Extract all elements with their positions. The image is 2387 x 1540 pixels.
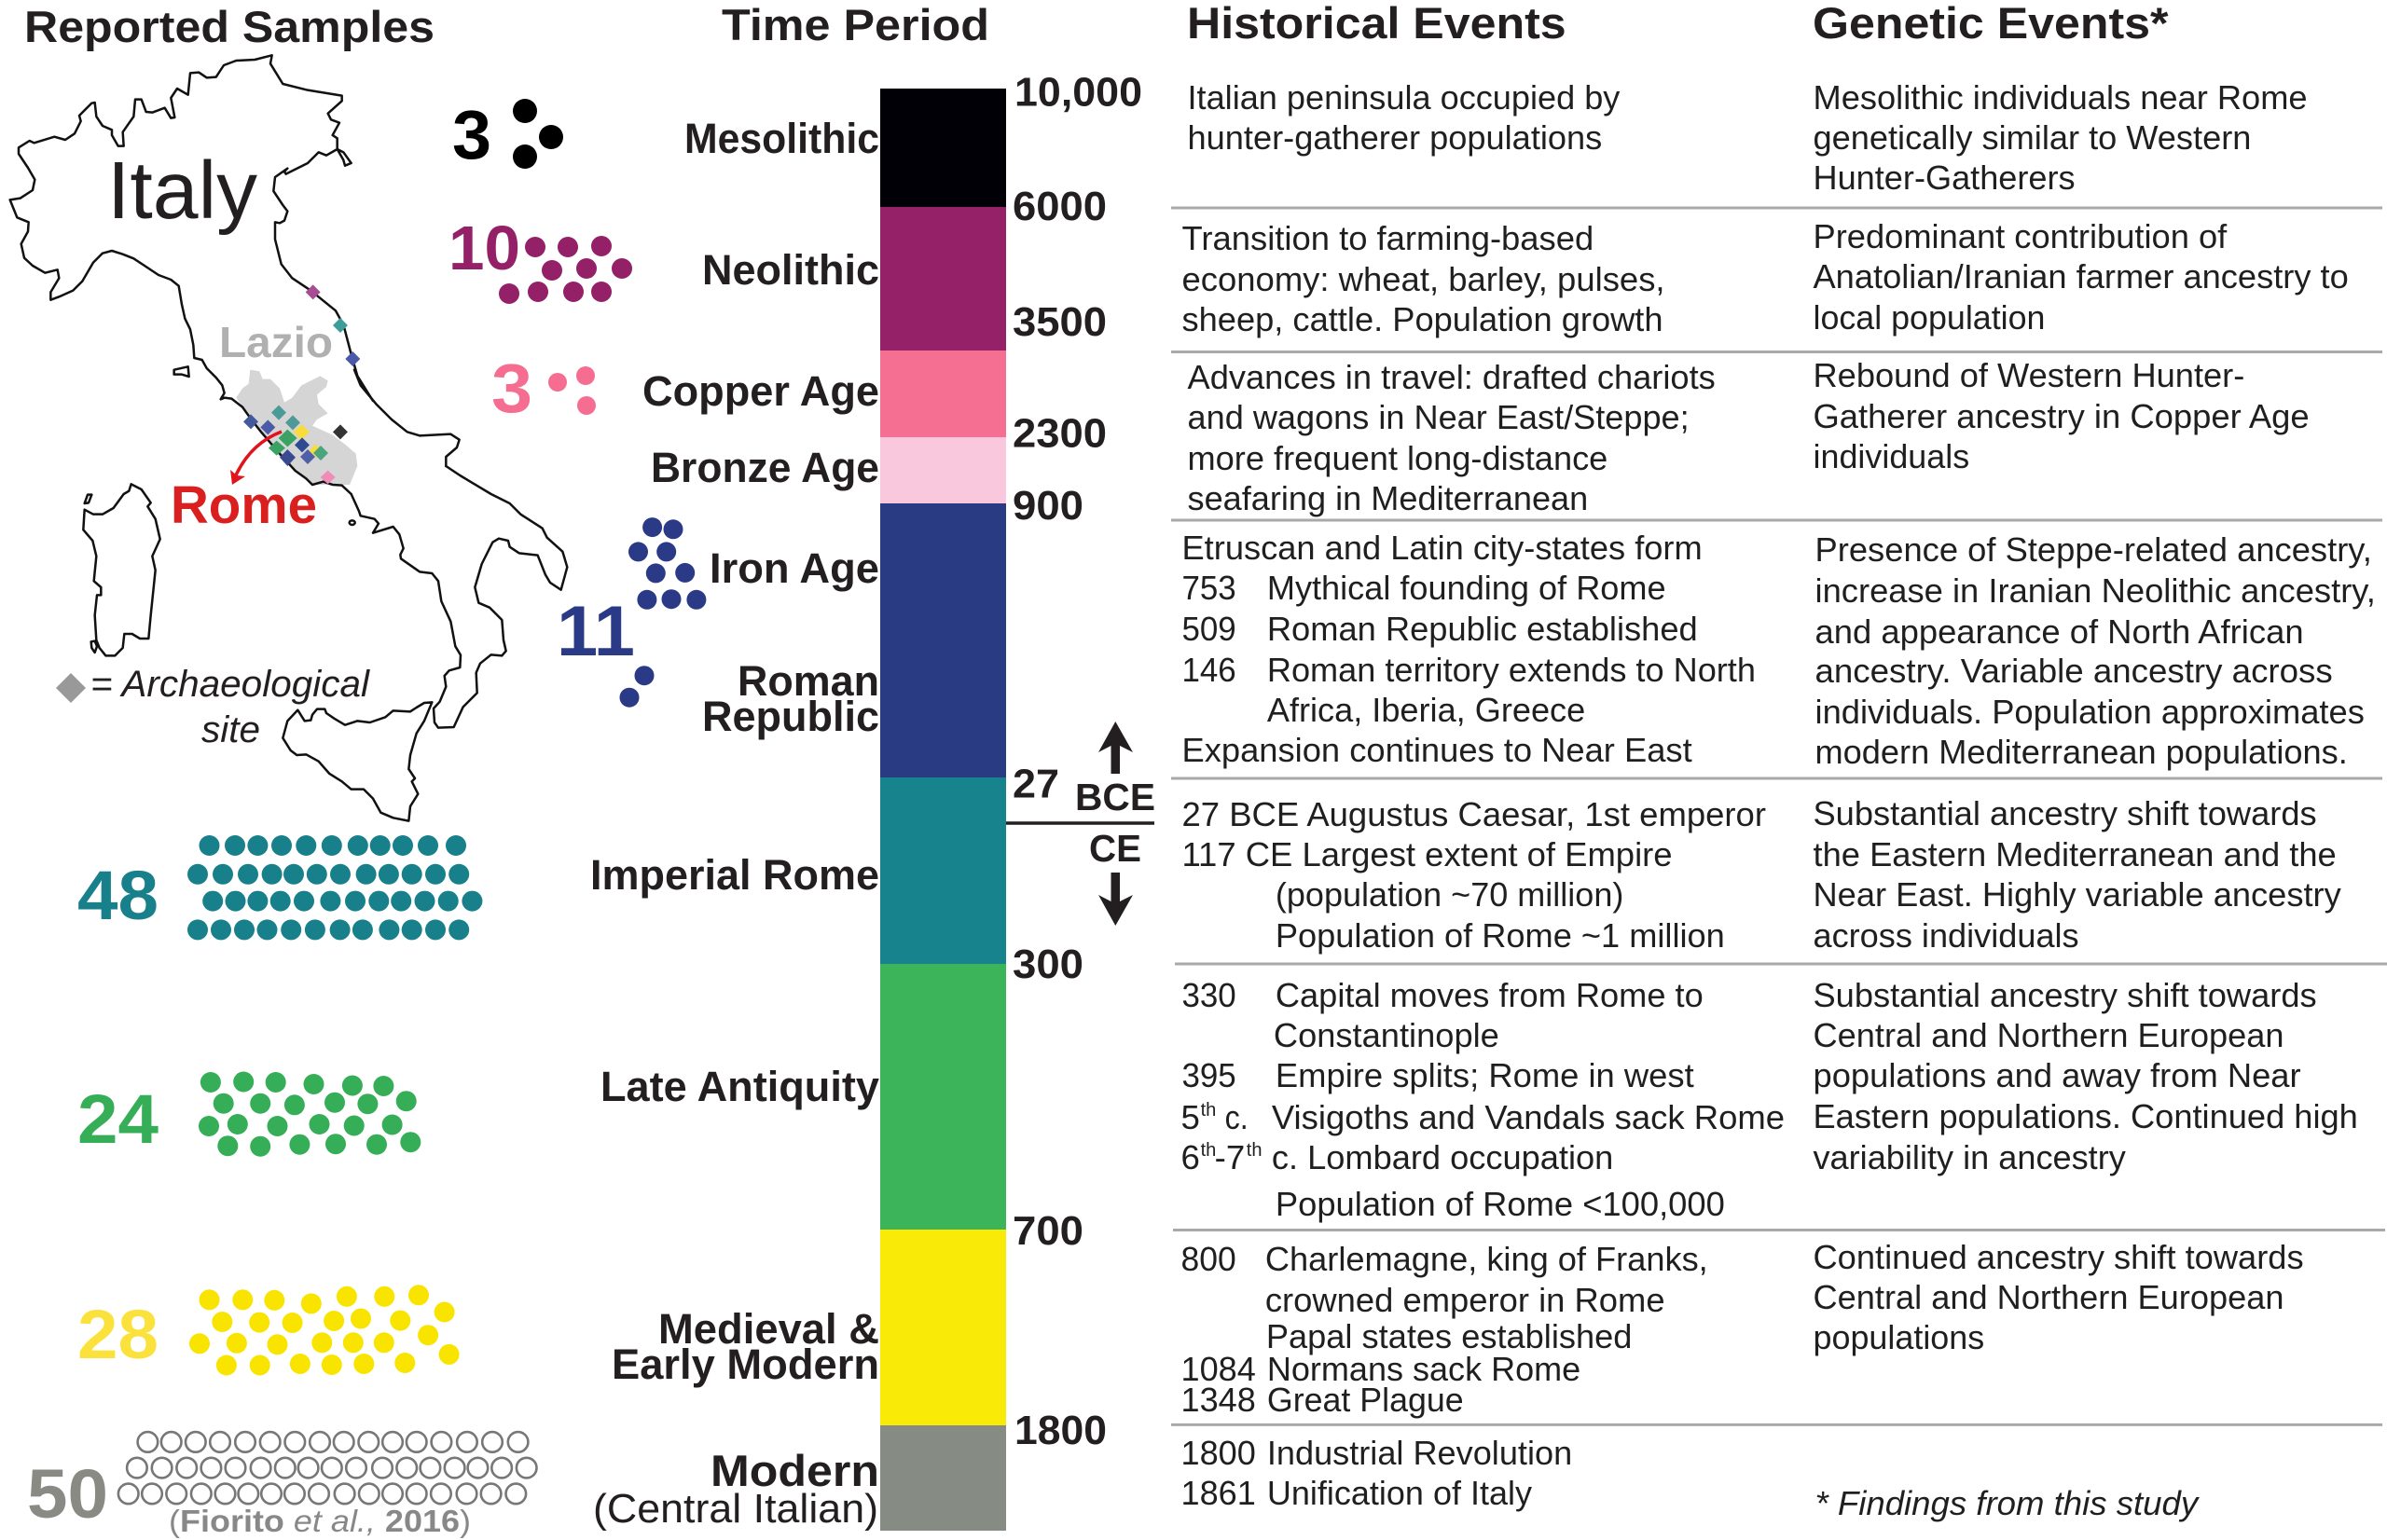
sample count: Copper Age 3 (491, 350, 596, 427)
sample count: Imperial Rome 48: 48 (77, 857, 159, 934)
row: Iron Age and Republic history: 146 (1182, 651, 1236, 689)
sample count: Neolithic 10: 10 (448, 213, 520, 283)
row: Late Antiquity history: Empire splits; Rome in west (1276, 1056, 1694, 1094)
row: Copper and Bronze Age history: more frequent long-distance (1188, 439, 1607, 477)
row: Modern history: Unification of Italy (1267, 1474, 1533, 1512)
row: Iron Age and Republic genetics: increase in Iranian Neolithic ancestry, (1815, 571, 2376, 610)
row: Late Antiquity history: 5 (1180, 1098, 1200, 1136)
heading: reported samples: Reported Samples (24, 2, 435, 51)
sample count: Modern 50 (Fiorito et al., 2016): 50 (27, 1455, 108, 1533)
row: Iron Age and Republic genetics: Presence of Steppe-related ancestry, (1815, 530, 2372, 569)
row: Late Antiquity history: Population of Rome <100,000 (1276, 1185, 1725, 1223)
sample count: Modern 50 (Fiorito et al., 2016): (Fiorito et al., 2016) (169, 1504, 471, 1538)
row: Imperial Rome genetics: Near East. Highly variable ancestry (1813, 875, 2341, 914)
row: Neolithic history: Transition to farming-based (1182, 219, 1594, 257)
row: Iron Age and Republic history: Roman territory extends to North (1267, 651, 1756, 689)
row: Modern history: 1861 (1180, 1474, 1256, 1512)
row: Late Antiquity history: 395 (1182, 1056, 1236, 1094)
period labels: Iron Age (710, 544, 879, 592)
row: Neolithic genetics (1813, 217, 2349, 337)
row: Late Antiquity genetics (1813, 976, 2358, 1176)
period labels: Neolithic (702, 246, 879, 294)
row: Neolithic genetics: local population (1813, 298, 2045, 337)
row: Imperial Rome genetics (1813, 794, 2341, 955)
sample count: Medieval 28: 28 (77, 1296, 159, 1373)
divider lines between table rows (1171, 208, 2387, 1424)
panel: historical events (1180, 0, 1785, 1512)
row: Modern history: Industrial Revolution (1267, 1434, 1572, 1472)
period labels: Roman (738, 657, 879, 705)
row: Medieval history: 1348 (1180, 1381, 1256, 1419)
legend: archaeological site: site (201, 709, 260, 750)
sample count: Iron Age and Republic 11 (557, 517, 706, 708)
date labels: 3500 (1013, 299, 1107, 345)
sample count: Late Antiquity 24: 24 (77, 1080, 159, 1158)
period labels: Early Modern (612, 1341, 879, 1388)
coastline outlines (10, 55, 567, 821)
row: Copper Age genetics (1813, 356, 2310, 475)
row: Imperial Rome history: Population of Rome ~1 million (1276, 916, 1725, 955)
row: Iron Age and Republic genetics: ancestry. Variable ancestry across (1815, 652, 2333, 690)
row: Copper Age genetics: Rebound of Western Hunter- (1813, 356, 2244, 394)
row: Neolithic genetics: Anatolian/Iranian farmer ancestry to (1813, 257, 2349, 296)
row: Late Antiquity history: c. Lombard occupation (1272, 1138, 1613, 1176)
row: Iron Age and Republic genetics: individuals. Population approximates (1815, 693, 2365, 731)
row: Imperial Rome history: 117 CE Largest extent of Empire (1182, 835, 1673, 873)
row: Imperial Rome genetics: Substantial ancestry shift towards (1813, 794, 2317, 832)
row: Neolithic history: sheep, cattle. Population growth (1182, 300, 1663, 338)
row: Medieval history: Normans sack Rome (1267, 1350, 1580, 1388)
row: Late Antiquity history: 330 (1182, 976, 1236, 1014)
row: Late Antiquity history: th (1201, 1140, 1216, 1161)
row: Late Antiquity history: 6 (1180, 1138, 1200, 1176)
sample count: Modern 50 (Fiorito et al., 2016) (27, 1432, 537, 1538)
heading: time period: Time Period (722, 0, 989, 49)
row: Mesolithic history (1188, 78, 1621, 157)
date labels: 1800 (1014, 1408, 1107, 1453)
Lazio region (236, 370, 357, 485)
row: Neolithic history: economy: wheat, barley, pulses, (1182, 260, 1665, 298)
date labels: 10,000 (1014, 69, 1142, 116)
row: Late Antiquity history: -7 (1215, 1138, 1245, 1176)
sample count: Mesolithic 3 (452, 96, 563, 173)
BCE / CE divider with arrows: BCE (1075, 776, 1155, 818)
row: Copper Age genetics: Gatherer ancestry in Copper Age (1813, 397, 2310, 435)
row: Medieval history: Charlemagne, king of Franks, (1265, 1240, 1708, 1278)
row: Iron Age and Republic genetics (1815, 530, 2376, 771)
period labels: (Central Italian) (593, 1486, 878, 1532)
row: Iron Age and Republic history: 753 (1182, 569, 1236, 607)
row: Medieval history (1180, 1240, 1708, 1419)
row: Mesolithic history: Italian peninsula occupied by (1188, 78, 1621, 117)
row: Late Antiquity genetics: populations and away from Near (1813, 1056, 2301, 1094)
row: Mesolithic genetics: Mesolithic individuals near Rome (1813, 78, 2308, 117)
label: Rome: Rome (171, 475, 317, 535)
label: Italy: Italy (107, 145, 257, 236)
date labels (1013, 69, 1142, 1453)
row: Mesolithic genetics: Hunter-Gatherers (1813, 158, 2076, 197)
period labels: Medieval & (658, 1305, 879, 1353)
sample count: Medieval 28 (77, 1285, 460, 1376)
row: Mesolithic history: hunter-gatherer populations (1188, 118, 1602, 157)
archaeological site markers (243, 284, 360, 484)
row: Iron Age and Republic history: Expansion continues to Near East (1182, 731, 1692, 769)
row: Late Antiquity history: th (1201, 1100, 1216, 1121)
date labels: 2300 (1013, 410, 1107, 457)
row: Medieval history: crowned emperor in Rome (1265, 1281, 1665, 1319)
label: Lazio: Lazio (219, 318, 333, 366)
row: Imperial Rome genetics: across individuals (1813, 916, 2079, 955)
row: Late Antiquity history (1180, 976, 1785, 1223)
row: Late Antiquity genetics: Substantial ancestry shift towards (1813, 976, 2317, 1014)
row: Late Antiquity history: th (1247, 1140, 1262, 1161)
row: Late Antiquity history: Visigoths and Vandals sack Rome (1272, 1098, 1785, 1136)
row: Iron Age and Republic history (1182, 529, 1756, 769)
row: Late Antiquity history: Capital moves from Rome to (1276, 976, 1704, 1014)
date labels: 300 (1013, 942, 1083, 987)
sample count: Iron Age and Republic 11: 11 (557, 592, 635, 671)
row: Medieval history: Papal states established (1266, 1317, 1632, 1355)
row: Medieval history: Great Plague (1267, 1381, 1464, 1419)
arrow to Rome (230, 432, 282, 485)
row: Imperial Rome genetics: the Eastern Mediterranean and the (1813, 835, 2337, 873)
period labels: Mesolithic (684, 115, 879, 162)
period labels: Copper Age (642, 367, 879, 415)
period labels: Bronze Age (651, 444, 879, 491)
row: Medieval genetics: populations (1813, 1318, 1984, 1356)
date labels: 700 (1013, 1208, 1083, 1254)
panel: time period (590, 0, 1155, 1532)
row: Copper and Bronze Age history: seafaring in Mediterranean (1188, 479, 1588, 517)
period labels: Modern (711, 1446, 879, 1495)
sample count: Late Antiquity 24 (77, 1072, 421, 1158)
row: Iron Age and Republic history: 509 (1182, 610, 1236, 648)
row: Late Antiquity history: Constantinople (1274, 1016, 1499, 1054)
sample count: Imperial Rome 48 (77, 835, 482, 940)
row: Medieval history: 1084 (1180, 1350, 1256, 1388)
panel: reported samples (10, 2, 706, 1538)
BCE / CE divider with arrows (1006, 722, 1155, 926)
row: Medieval genetics: Central and Northern European (1813, 1278, 2284, 1316)
row: Late Antiquity history: c. (1225, 1098, 1249, 1136)
period labels: Republic (702, 693, 879, 740)
row: Mesolithic genetics (1813, 78, 2308, 197)
row: Modern history: 1800 (1180, 1434, 1256, 1472)
row: Imperial Rome history (1182, 795, 1766, 955)
date labels: 6000 (1013, 184, 1107, 229)
row: Medieval genetics: Continued ancestry shift towards (1813, 1238, 2304, 1276)
panel: genetic events (1813, 0, 2376, 1522)
row: Copper and Bronze Age history: and wagons in Near East/Steppe; (1188, 398, 1690, 436)
row: Iron Age and Republic history: Roman Republic established (1267, 610, 1698, 648)
sample count: Copper Age 3: 3 (491, 350, 532, 427)
date labels: 27 (1013, 761, 1059, 807)
legend: archaeological site (56, 664, 370, 750)
period labels (590, 115, 879, 1532)
row: Modern history (1180, 1434, 1572, 1512)
row: Copper and Bronze Age history (1188, 358, 1716, 517)
row: Iron Age and Republic genetics: and appearance of North African (1815, 612, 2304, 651)
map of Italy (10, 55, 567, 821)
sample count: Neolithic 10 (448, 213, 632, 304)
row: Mesolithic genetics: genetically similar to Western (1813, 118, 2251, 157)
row: Imperial Rome history: (population ~70 million) (1276, 875, 1623, 914)
row: Neolithic genetics: Predominant contribution of (1813, 217, 2228, 255)
period labels: Late Antiquity (600, 1063, 879, 1110)
date labels: 900 (1013, 483, 1083, 529)
BCE / CE divider with arrows: CE (1089, 827, 1141, 870)
row: Iron Age and Republic genetics: modern Mediterranean populations. (1815, 733, 2348, 771)
timeline bar (880, 89, 1006, 1531)
row: Iron Age and Republic history: Africa, Iberia, Greece (1267, 691, 1585, 729)
row: Medieval history: 800 (1180, 1240, 1236, 1278)
row: Iron Age and Republic history: Etruscan and Latin city-states form (1182, 529, 1703, 567)
row: Neolithic history (1182, 219, 1665, 338)
row: Medieval genetics (1813, 1238, 2304, 1356)
row: Late Antiquity genetics: Central and Northern European (1813, 1016, 2284, 1054)
row: Late Antiquity genetics: variability in ancestry (1813, 1138, 2127, 1176)
sample count: Mesolithic 3: 3 (452, 96, 491, 173)
period labels: Imperial Rome (590, 851, 879, 899)
row: Copper and Bronze Age history: Advances in travel: drafted chariots (1188, 358, 1716, 396)
row: Late Antiquity genetics: Eastern populations. Continued high (1813, 1097, 2358, 1135)
footnote: * Findings from this study (1815, 1484, 2201, 1522)
row: Imperial Rome history: 27 BCE Augustus Caesar, 1st emperor (1182, 795, 1766, 833)
row: Iron Age and Republic history: Mythical founding of Rome (1267, 569, 1666, 607)
row: Copper Age genetics: individuals (1813, 437, 1969, 475)
legend: archaeological site: = Archaeological (90, 664, 370, 705)
